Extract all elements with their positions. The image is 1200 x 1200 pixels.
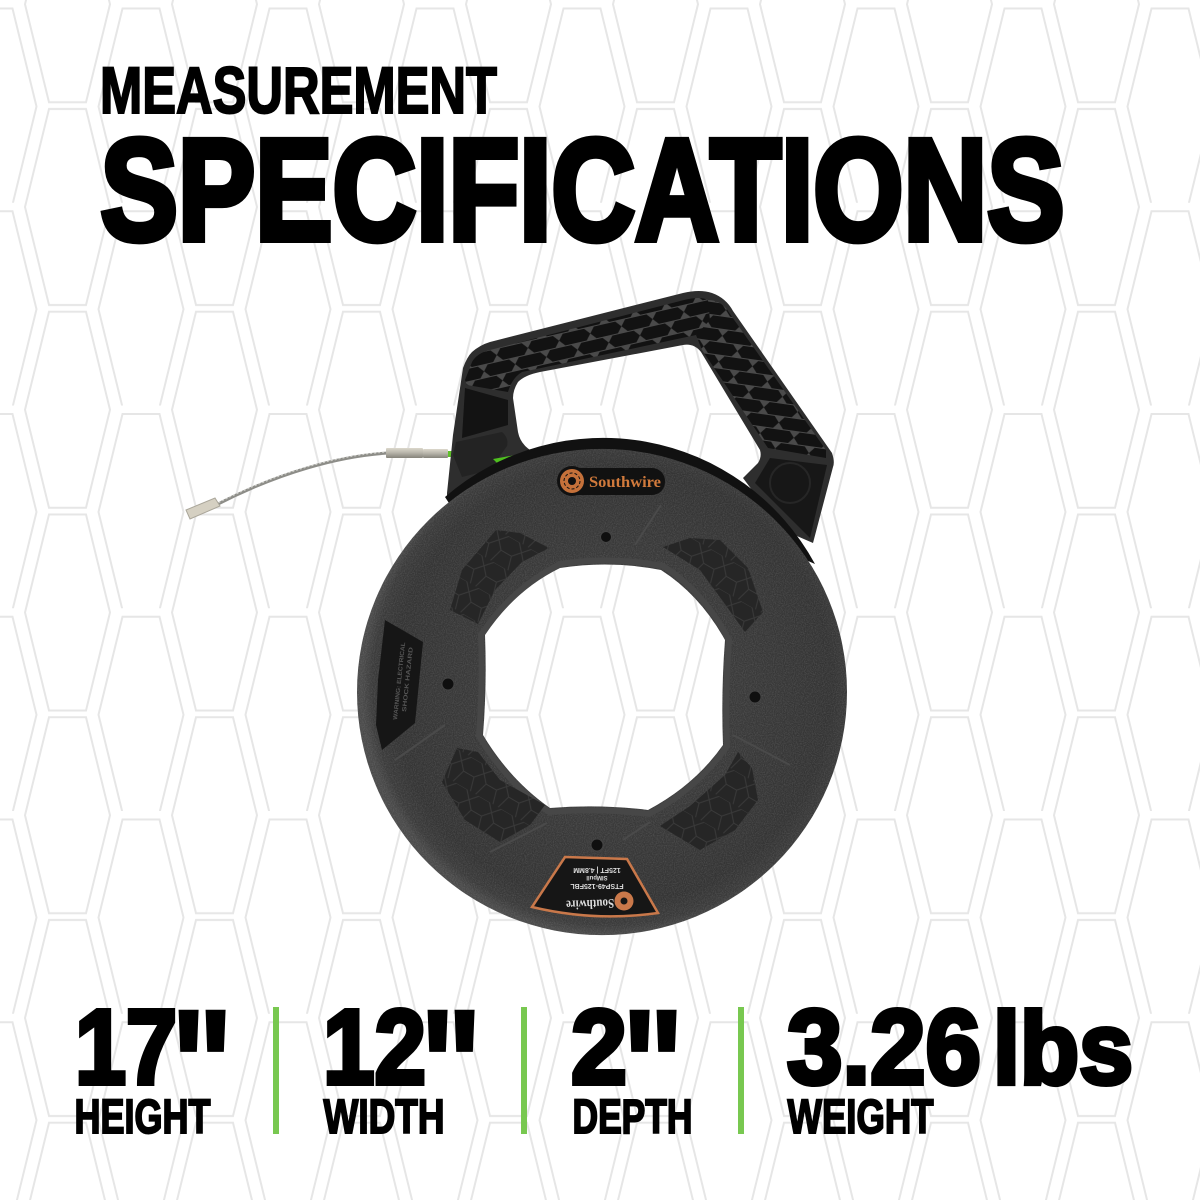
spec: depth: DEPTH	[572, 1091, 692, 1144]
divider	[738, 1007, 744, 1134]
product label	[532, 857, 658, 916]
handle	[447, 291, 834, 543]
safety label: SHOCK HAZARD	[402, 646, 415, 712]
handle dark recess	[462, 388, 508, 438]
spec: width: ''	[424, 982, 478, 1144]
spec: width: WIDTH	[324, 1091, 444, 1144]
screws	[442, 532, 761, 851]
green tape	[493, 453, 527, 463]
spec: weight: lbs	[993, 992, 1133, 1106]
rear reel rim	[445, 438, 815, 564]
spec: weight: WEIGHT	[788, 1091, 934, 1144]
hole bevel	[479, 560, 729, 814]
product label: FTSP49-125FBL	[570, 882, 624, 889]
spec: width: 12	[323, 988, 426, 1106]
cable with metal leader	[186, 448, 454, 519]
grip patch upper right	[663, 538, 763, 632]
safety label: WARNING: ELECTRICAL	[393, 642, 407, 720]
divider	[521, 1007, 527, 1134]
spec: height: 17	[75, 988, 177, 1106]
spec: depth	[571, 982, 692, 1144]
hub ridges	[395, 505, 790, 852]
grip patch lower right	[660, 752, 758, 850]
product label: 125FT | 4.8MM	[573, 866, 621, 873]
product label: SIMpull	[586, 874, 608, 880]
spec: weight	[787, 988, 1133, 1144]
southwire logo badge	[557, 466, 665, 496]
spec: height	[74, 982, 229, 1144]
handle lower emboss	[755, 458, 827, 538]
handle grip top	[465, 298, 716, 392]
heading: measurement: MEASUREMENT	[100, 54, 497, 127]
grip patch upper left	[450, 530, 549, 624]
title	[100, 54, 1064, 270]
reel front face	[357, 449, 847, 935]
spec: depth: 2	[571, 988, 627, 1106]
product label: Southwire	[566, 896, 614, 913]
handle latch	[453, 432, 507, 477]
grip patch lower left	[442, 748, 545, 842]
spec: weight: 3.26	[787, 988, 981, 1106]
safety label	[376, 620, 423, 750]
southwire logo badge: Southwire	[589, 474, 661, 491]
spec: depth: ''	[626, 982, 680, 1144]
spec: width	[323, 982, 478, 1144]
handle grip side	[696, 300, 826, 458]
spec: height: ''	[175, 982, 229, 1144]
product: fish tape reel	[186, 291, 847, 935]
divider	[273, 1007, 279, 1134]
spec: height: HEIGHT	[74, 1091, 210, 1144]
